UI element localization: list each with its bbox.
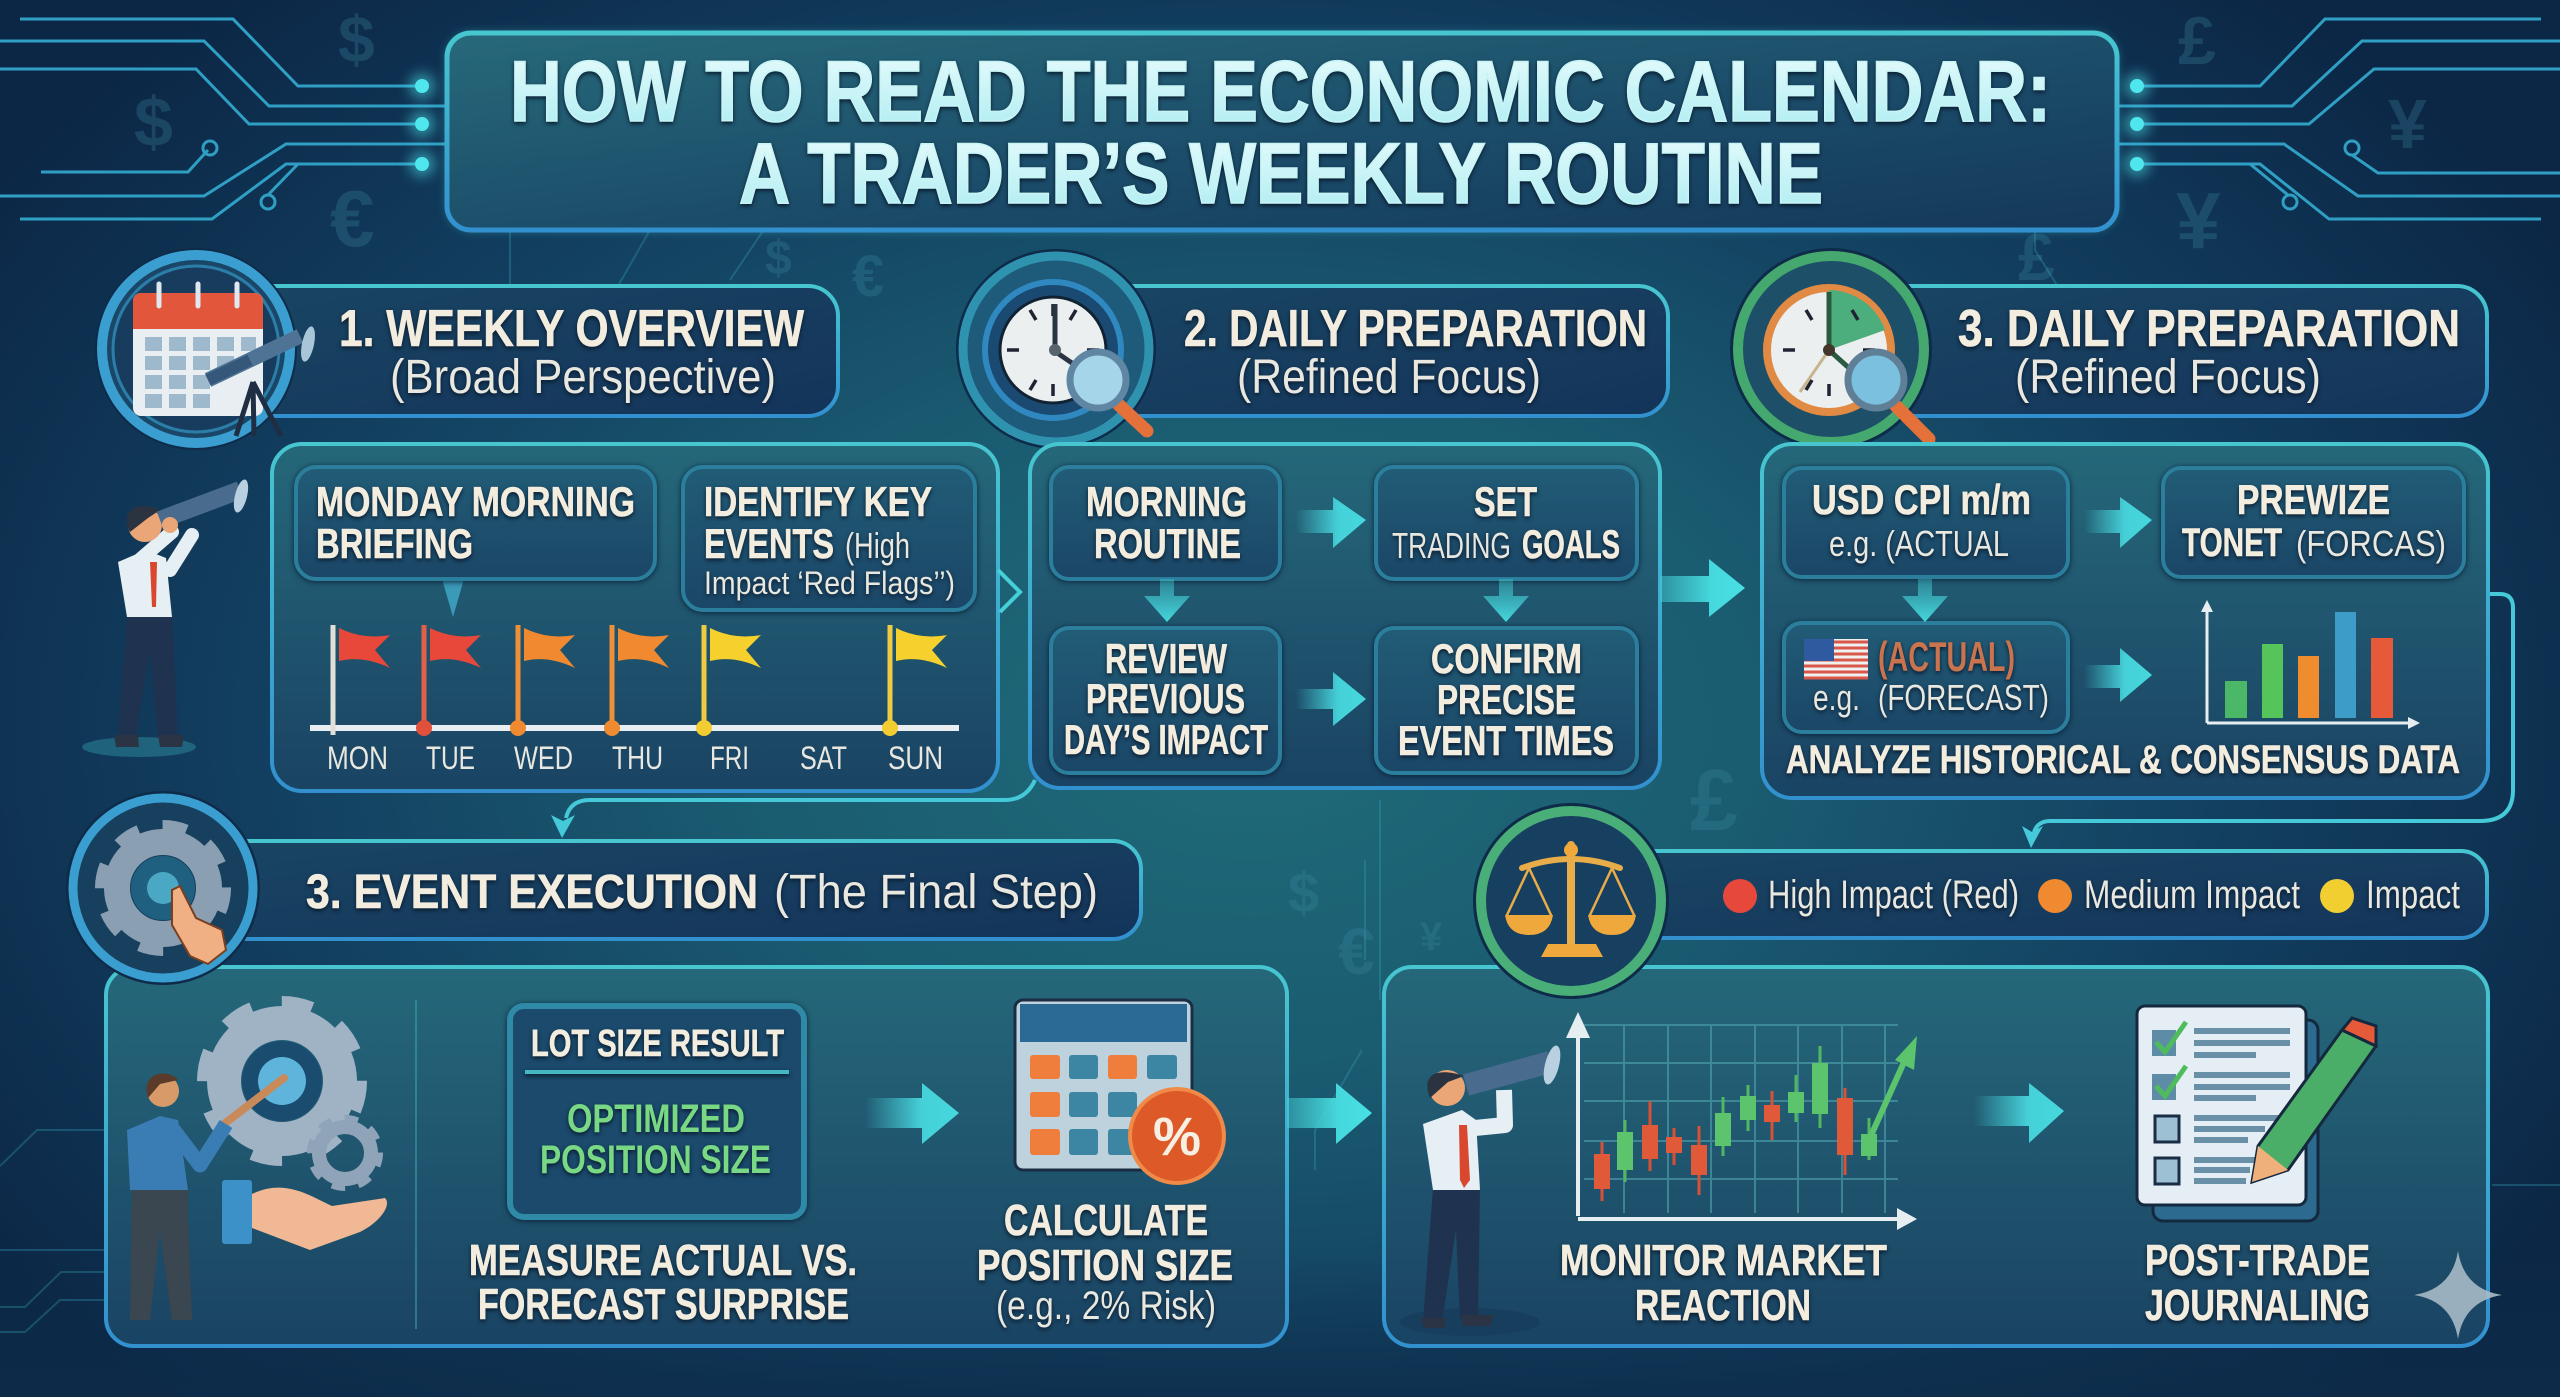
faint currency symbols: € [330,174,374,263]
faint currency symbols [134,2,2427,988]
header text: (Refined Focus) [2015,351,2321,404]
bar chart [2201,600,2420,729]
caption: post-trade journaling [2145,1236,2370,1330]
title text [510,44,2051,222]
faint currency symbols: £ [2178,3,2216,79]
caption: monitor market reaction: REACTION [1635,1281,1811,1330]
box: set trading goals: GOALS [1522,523,1620,567]
box: monday morning briefing: MONDAY MORNING [316,478,635,525]
result box: optimized position size: LOT SIZE RESULT [531,1023,784,1065]
header text: 2. DAILY PREPARATION [1184,300,1647,358]
caption: calculate position size: CALCULATE [1004,1196,1208,1245]
box: prewize: (FORCAS) [2296,523,2446,564]
header: weekly overview [230,286,838,416]
header text: (Broad Perspective) [390,351,776,404]
icon: calendar and telescope [95,248,318,450]
day labels: FRI [710,740,749,776]
header: daily preparation 2 [1100,286,1668,416]
header text [1958,300,2460,404]
header: daily preparation 3 [1880,286,2487,416]
panel: event execution [106,967,1287,1346]
connector: panel 3 to legend [2022,594,2513,848]
result box: optimized position size: OPTIMIZED [567,1097,745,1141]
legend items [1723,873,2460,917]
box: identify key events: IDENTIFY KEY [704,478,932,525]
box: identify key events: Impact ‘Red Flags’’) [704,565,955,601]
box: usd cpi: e.g. (ACTUAL [1829,523,2009,564]
faint currency symbols: ¥ [2176,176,2221,265]
box: confirm event times [1376,628,1637,773]
box: set trading goals: SET [1474,478,1537,525]
box: prewize: TONET [2182,521,2282,565]
box: flag actual forecast: (FORECAST) [1878,677,2049,718]
faint currency symbols: $ [765,232,792,285]
arrow: panel 2 to panel 3 [1660,559,1745,617]
caption: calculate position size [977,1196,1233,1328]
box: identify key events [683,467,975,610]
header text [306,866,1098,919]
box: identify key events: EVENTS [704,520,834,567]
icon: us flag [1804,639,1868,679]
arrow: panel 4 to panel 5 [1287,1083,1372,1144]
arrow [1974,1083,2064,1143]
caption: post-trade journaling: JOURNALING [2145,1281,2370,1330]
sparkle mark [2414,1251,2502,1339]
box: flag actual forecast [1784,623,2068,732]
box: identify key events: (High [845,525,910,566]
title text: A TRADER’S WEEKLY ROUTINE [739,126,1823,222]
caption: post-trade journaling: POST-TRADE [2145,1236,2370,1285]
arrows inside panel [1902,497,2152,702]
header: event execution [220,841,1141,939]
icon: journal checklist and pencil [2137,1006,2376,1221]
title panel [447,33,2117,230]
day labels: SAT [800,740,847,776]
caption: monitor market reaction: MONITOR MARKET [1560,1236,1887,1285]
box: prewize [2163,468,2464,577]
faint currency symbols: ¥ [2388,85,2427,163]
box: set trading goals: TRADING [1392,525,1511,566]
result box: optimized position size: POSITION SIZE [540,1138,771,1182]
icon: green clock and magnifier [1730,248,1932,450]
box: review previous day: DAY’S IMPACT [1064,716,1268,763]
panel: daily preparation [1030,444,1660,788]
box: flag actual forecast: (ACTUAL) [1878,633,2015,680]
box: monday morning briefing: BRIEFING [316,520,473,567]
person with telescope [82,478,251,757]
box: set trading goals [1376,467,1637,579]
caption: measure surprise: FORECAST SURPRISE [478,1280,849,1329]
header text: 3. EVENT EXECUTION [306,866,758,919]
legend items: High Impact (Red) [1768,873,2019,917]
header text [1184,300,1647,404]
panel: weekly overview [272,444,998,791]
icon: balance scales [1473,803,1669,999]
box: confirm event times: PRECISE [1437,676,1576,723]
box: flag actual forecast: e.g. [1813,677,1860,718]
panel: data analysis [1762,444,2488,798]
candlestick chart [1566,1012,1917,1230]
result box: optimized position size [510,1006,804,1217]
icon: calculator with percent badge [1015,1000,1224,1183]
caption: calculate position size: (e.g., 2% Risk) [996,1284,1216,1328]
header text: (Refined Focus) [1237,351,1541,404]
box: prewize: PREWIZE [2237,476,2390,523]
caption: measure surprise [469,1236,857,1329]
day labels: WED [514,740,573,776]
caption: monitor market reaction [1560,1236,1887,1330]
day labels: MON [327,740,388,776]
connector: panel 2 to event execution [551,780,1035,838]
icon: calculator with percent badge: % [1153,1107,1201,1167]
faint currency symbols: $ [1288,861,1319,924]
box: usd cpi [1784,468,2068,577]
arrow [865,1083,959,1144]
header text: (The Final Step) [774,866,1098,919]
header: impact legend [1630,851,2487,938]
faint currency symbols: $ [134,83,173,161]
box: morning routine [1051,467,1280,579]
illustration: trader adjusting gears [127,1003,387,1320]
day labels [327,740,943,776]
icon: clock and magnifier [956,249,1156,449]
chart: week timeline with flags [310,625,959,776]
faint currency symbols: £ [2018,220,2055,294]
icon: gear and pointing hand [66,791,260,985]
box: morning routine: MORNING [1086,478,1247,525]
legend items: Impact [2366,873,2460,917]
day labels: TUE [426,740,475,776]
header text: 3. DAILY PREPARATION [1958,300,2460,358]
box: monday morning briefing [296,467,655,617]
box: review previous day: REVIEW [1105,635,1227,682]
caption: calculate position size: POSITION SIZE [977,1241,1233,1290]
panel: market reaction [1384,967,2502,1346]
box: morning routine: ROUTINE [1094,520,1241,567]
day labels: THU [612,740,663,776]
faint currency symbols: £ [1690,753,1738,849]
arrows inside panel [1144,497,1529,726]
caption: measure surprise: MEASURE ACTUAL VS. [469,1236,857,1285]
person with telescope [1400,1044,1564,1336]
title text: HOW TO READ THE ECONOMIC CALENDAR: [510,44,2051,140]
faint currency symbols: € [852,244,884,309]
legend items: Medium Impact [2084,873,2300,917]
box: confirm event times: EVENT TIMES [1398,717,1614,764]
box: review previous day [1051,628,1280,773]
faint currency symbols: € [1338,914,1375,988]
header text: 1. WEEKLY OVERVIEW [339,300,805,358]
circuit traces left [0,19,447,219]
circuit traces right [2117,19,2560,219]
arrow: panel 1 to panel 2 [998,570,1020,612]
box: review previous day: PREVIOUS [1086,675,1245,722]
box: confirm event times: CONFIRM [1431,635,1582,682]
box: usd cpi: USD CPI m/m [1812,476,2031,523]
day labels: SUN [888,740,943,776]
faint currency symbols: $ [338,2,375,76]
header text [339,300,805,404]
faint currency symbols: ¥ [1420,915,1443,959]
